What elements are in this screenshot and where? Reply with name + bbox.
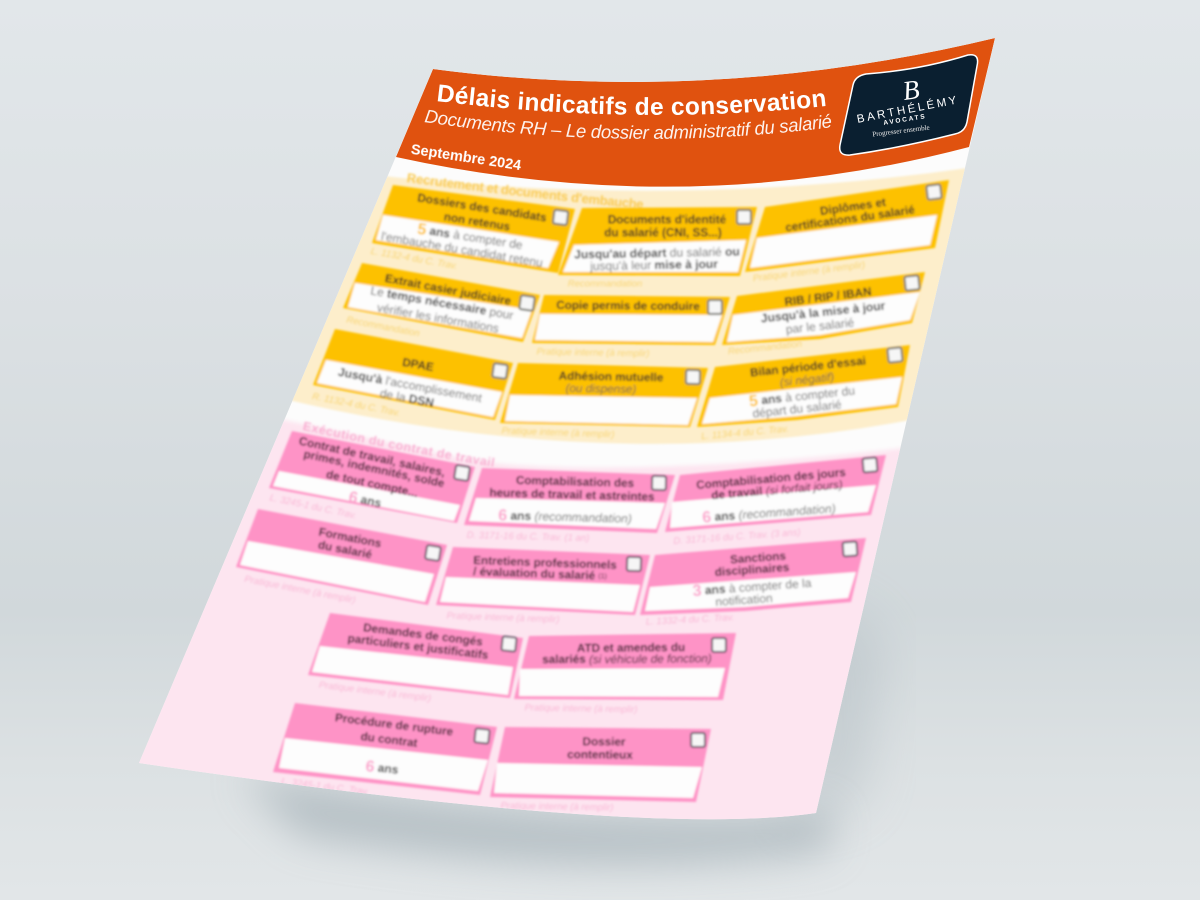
card: dossier contentieux: Dossier — [582, 735, 626, 749]
card: bilan période d'essai: départ du salarié — [752, 397, 843, 421]
header band — [396, 38, 995, 187]
section heading: execution: Exécution du contrat de travail — [302, 420, 496, 468]
card: extrait casier judiciaire: Recommandation — [345, 314, 421, 340]
card: sanctions: notification — [715, 591, 773, 609]
card: dossiers des candidats: non retenus — [443, 210, 512, 234]
card: DPAE — [311, 329, 513, 420]
card: dossiers des candidats: l'embauche du candidat retenu — [380, 229, 544, 270]
card: RIB: RIB / RIP / IBAN — [784, 285, 872, 309]
yellow cards group — [311, 180, 949, 442]
card: RIB: par le salarié — [785, 315, 855, 337]
card: DPAE: Jusqu'à l'accomplissement — [337, 365, 484, 405]
card: extrait casier judiciaire: vérifier les informations — [376, 300, 500, 336]
card: entretiens: Pratique interne (à remplir) — [446, 611, 560, 625]
card: sanctions: 3 ans à compter de la — [692, 574, 812, 600]
logo: B — [901, 74, 921, 106]
panel: contract execution section background — [110, 417, 905, 840]
card: jours de travail: D. 3171-16 du C. Trav. (3 ans) — [673, 527, 801, 547]
card: sanctions: L. 1332-4 du C. Trav. — [646, 612, 734, 628]
card: heures de travail: heures de travail et astreintes — [489, 486, 655, 504]
card: RIB: Recommandation — [727, 339, 803, 357]
card: jours de travail: de travail (si forfait jours) — [711, 478, 843, 502]
card: heures de travail: D. 3171-16 du C. Trav. (1 an) — [467, 530, 589, 544]
card: contrat de travail — [269, 431, 475, 523]
card: adhésion mutuelle: (ou dispense) — [565, 382, 637, 396]
card: heures de travail: Comptabilisation des — [516, 474, 635, 490]
card: documents d'identité: Documents d'identité — [608, 214, 727, 226]
card: demandes de congés — [308, 613, 523, 704]
card: contrat de travail: Contrat de travail, salaires, — [298, 435, 446, 479]
card: diplômes: Diplômes et — [819, 196, 887, 218]
card: RIB: Jusqu'à la mise à jour — [760, 298, 886, 325]
card: heures de travail — [464, 468, 675, 544]
card: procédure de rupture: L. 3245-1 du C. Trav. — [280, 776, 370, 798]
card: bilan période d'essai — [697, 345, 910, 442]
card: documents d'identité: Jusqu'au départ du salarié ou — [574, 245, 740, 261]
card: contrat de travail: primes, indemnités, solde — [302, 448, 446, 490]
card: dossier contentieux — [490, 727, 711, 813]
card: contrat de travail: de tout compte... — [325, 468, 419, 500]
card: RIB — [722, 272, 925, 357]
card: extrait casier judiciaire: Extrait casier judiciaire — [384, 272, 513, 308]
card: ATD et amendes: Pratique interne (à remplir) — [524, 703, 638, 715]
card: dossier contentieux: contentieux — [567, 748, 633, 762]
card: copie permis de conduire: Pratique interne (à remplir) — [536, 347, 650, 359]
card: contrat de travail: 6 ans — [347, 488, 383, 512]
card: procédure de rupture — [273, 703, 497, 798]
card: bilan période d'essai: L. 1134-4 du C. Trav. — [701, 424, 789, 442]
card: dossiers des candidats: L. 1132-4 du C. Trav. — [370, 246, 458, 272]
card: formations — [236, 509, 447, 606]
card: copie permis de conduire — [532, 295, 730, 359]
logo — [840, 55, 978, 155]
card: bilan période d'essai: Bilan période d'essai — [749, 354, 867, 380]
card: formations: du salarié — [317, 538, 374, 562]
card: sanctions: Sanctions — [730, 550, 787, 566]
card: documents d'identité: jusqu'à leur mise à jour — [589, 257, 718, 273]
card: bilan période d'essai: (si négatif) — [779, 371, 835, 389]
pink cards group — [236, 431, 886, 813]
card: DPAE: de la DSN — [379, 386, 435, 410]
card: diplômes — [745, 180, 949, 284]
document content — [139, 38, 995, 820]
card: bilan période d'essai: 5 ans à compter du — [748, 382, 856, 410]
card: procédure de rupture: Procédure de rupture — [334, 711, 454, 739]
card: extrait casier judiciaire: Le temps nécessaire pour — [369, 284, 515, 322]
logo: Progresser ensemble — [872, 124, 930, 138]
date: Septembre 2024 — [410, 142, 522, 174]
card: jours de travail: Comptabilisation des jours — [696, 466, 847, 492]
card: entretiens: / évaluation du salarié (1) — [473, 565, 607, 583]
card: adhésion mutuelle: Adhésion mutuelle — [559, 370, 664, 384]
paper sheet — [139, 38, 995, 819]
card: demandes de congés: particuliers et justificatifs — [347, 632, 490, 662]
card: procédure de rupture: 6 ans — [365, 758, 400, 778]
card: dossiers des candidats: 5 ans à compter de — [416, 220, 524, 254]
card: dossier contentieux: Pratique interne (à remplir) — [500, 801, 614, 813]
card: DPAE: R. 1132-4 du C. Trav. — [311, 391, 401, 419]
card: copie permis de conduire: Copie permis de conduire — [556, 299, 700, 313]
card: entretiens: Entretiens professionnels — [473, 554, 617, 572]
card: ATD et amendes: ATD et amendes du — [577, 641, 685, 655]
card: dossiers des candidats — [370, 185, 575, 273]
card: contrat de travail: L. 3245-1 du C. Trav. — [269, 492, 357, 522]
card: jours de travail — [665, 455, 886, 547]
card: demandes de congés: Pratique interne (à remplir) — [318, 680, 432, 704]
card: documents d'identité — [558, 207, 757, 290]
card: DPAE: DPAE — [401, 356, 435, 374]
card: diplômes: Pratique interne (à remplir) — [752, 260, 866, 284]
card: adhésion mutuelle — [500, 363, 708, 440]
paper shadow — [240, 600, 880, 864]
title: Délais indicatifs de conservation — [438, 84, 826, 115]
card: formations: Formations — [318, 526, 383, 551]
card: adhésion mutuelle: Pratique interne (à remplir) — [501, 426, 615, 440]
subtitle: Documents RH – Le dossier administratif du salarié — [424, 110, 832, 139]
card: sanctions: disciplinaires — [714, 561, 790, 579]
card: diplômes: certifications du salarié — [784, 203, 916, 235]
card: sanctions — [640, 538, 866, 628]
card: dossiers des candidats: Dossiers des candidats — [416, 191, 548, 225]
card: documents d'identité: du salarié (CNI, SS...) — [604, 226, 722, 240]
card: demandes de congés: Demandes de congés — [363, 621, 484, 649]
card: heures de travail: 6 ans (recommandation) — [498, 507, 632, 527]
card: entretiens — [436, 547, 650, 625]
logo: BARTHÉLÉMY — [856, 93, 960, 126]
section heading: recruitment: Recrutement et documents d'embauche — [406, 172, 644, 208]
card: ATD et amendes: salariés (si véhicule de fonction) — [542, 652, 712, 666]
panel: recruitment section background — [280, 167, 975, 444]
card: extrait casier judiciaire — [343, 263, 540, 342]
card: formations: Pratique interne (à remplir) — [243, 574, 357, 606]
logo: AVOCATS — [883, 113, 927, 127]
card: documents d'identité: Recommandation — [568, 278, 642, 290]
card: ATD et amendes — [514, 633, 736, 715]
card: procédure de rupture: du contrat — [360, 730, 418, 750]
card: jours de travail: 6 ans (recommandation) — [702, 500, 836, 526]
